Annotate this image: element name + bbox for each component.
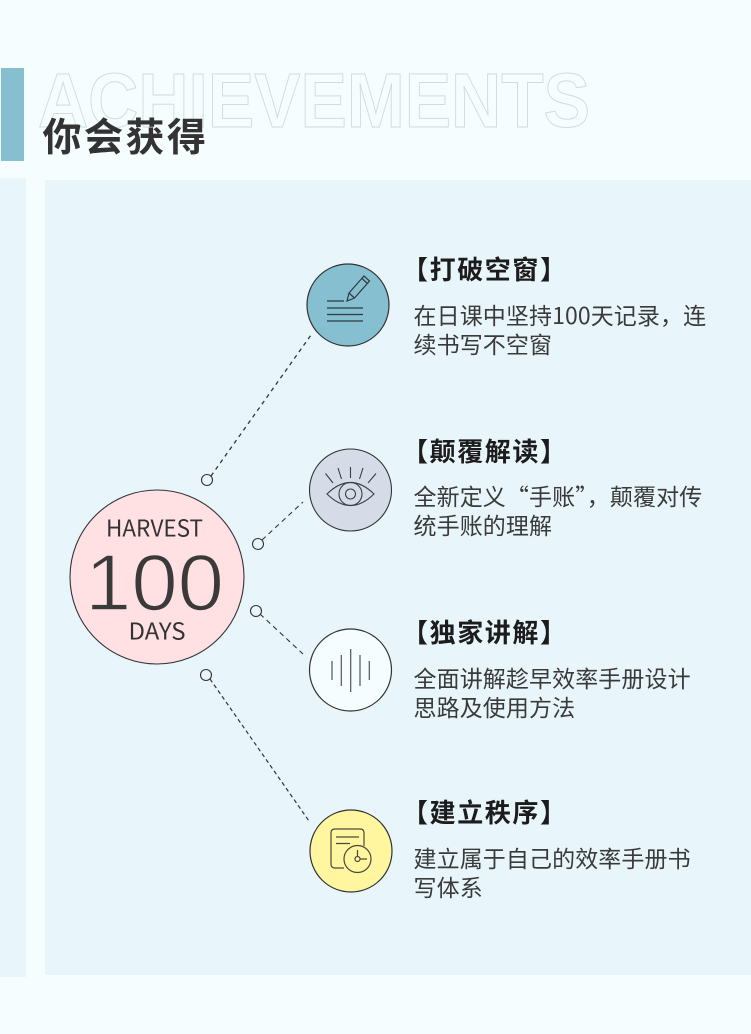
item 1 heading: 【打破空窗】 xyxy=(402,250,568,287)
icon: sound wave xyxy=(310,629,392,711)
icon: eye xyxy=(310,449,392,531)
left side strip xyxy=(0,178,26,977)
item 2 text: 统手账的理解 xyxy=(414,507,552,541)
central badge: HARVEST 100 DAYS xyxy=(70,490,244,664)
connector: to item 3 xyxy=(250,606,303,654)
item 2 heading: 【颠覆解读】 xyxy=(402,432,568,469)
central badge: HARVEST 100 DAYS: DAYS xyxy=(128,612,186,646)
item 3 heading: 【独家讲解】 xyxy=(402,613,568,650)
item 3 text: 全面讲解趁早效率手册设计 xyxy=(414,660,691,694)
connector: to item 1 xyxy=(202,335,311,486)
item 1 text xyxy=(414,297,706,360)
icon: pencil writing xyxy=(307,264,389,346)
connector: to item 2 xyxy=(252,502,303,550)
central badge: HARVEST 100 DAYS: 100 xyxy=(85,538,224,627)
item 2 text: 全新定义“手账”，颠覆对传 xyxy=(414,478,702,512)
item 1 text: 在日课中坚持100天记录，连 xyxy=(414,297,706,331)
connector: to item 4 xyxy=(200,670,309,821)
item 4 text: 建立属于自己的效率手册书 xyxy=(414,840,691,874)
item 3 text: 思路及使用方法 xyxy=(414,689,575,723)
icon: document with clock xyxy=(310,810,392,892)
title: 你会获得 xyxy=(42,107,209,163)
item 4 heading: 【建立秩序】 xyxy=(402,793,568,830)
item 2 text xyxy=(414,478,702,541)
item 4 text: 写体系 xyxy=(414,869,483,903)
item 4 text xyxy=(414,840,691,903)
item 3 text xyxy=(414,660,691,723)
content panel xyxy=(45,180,751,975)
heading accent bar xyxy=(1,68,24,161)
central badge: HARVEST 100 DAYS: HARVEST xyxy=(106,510,203,544)
item 1 text: 续书写不空窗 xyxy=(414,326,552,360)
